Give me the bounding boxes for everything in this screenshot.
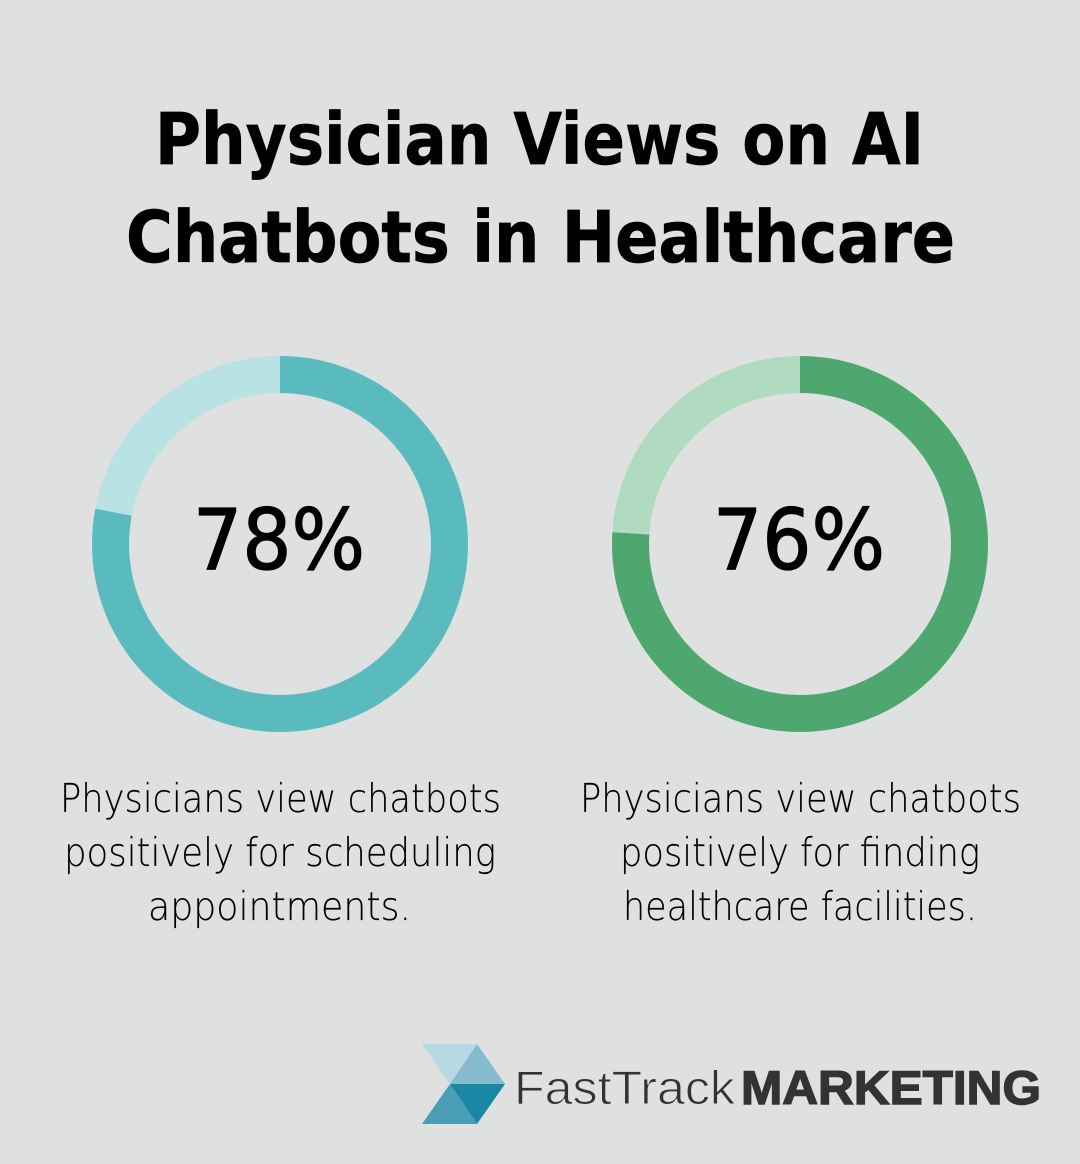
stat: 78%: 78%	[193, 491, 365, 589]
donut chart: 78%	[110, 374, 450, 714]
description: scheduling	[60, 776, 501, 930]
donut chart: 76%	[630, 374, 970, 714]
panel: finding facilities	[580, 374, 1021, 930]
stat: 76%: 76%	[713, 491, 885, 589]
title: Chatbots in Healthcare	[126, 196, 955, 279]
logo: FastTrack Marketing	[422, 1044, 1041, 1124]
description: facilities	[580, 776, 1021, 930]
wordmark	[514, 1061, 1041, 1114]
description: scheduling: appointments.	[148, 884, 411, 930]
icon: logo triangles	[422, 1044, 505, 1124]
description: facilities: healthcare facilities.	[623, 884, 977, 930]
wordmark: MARKETING	[741, 1061, 1041, 1114]
title	[126, 98, 955, 279]
panel: scheduling appointments	[60, 374, 501, 930]
description: scheduling: Physicians view chatbots	[60, 776, 501, 822]
description: scheduling: positively for scheduling	[64, 830, 496, 876]
wordmark: FastTrack	[514, 1061, 736, 1114]
description: facilities: Physicians view chatbots	[580, 776, 1021, 822]
title: Physician Views on AI	[155, 98, 924, 181]
description: facilities: positively for finding	[620, 830, 980, 876]
